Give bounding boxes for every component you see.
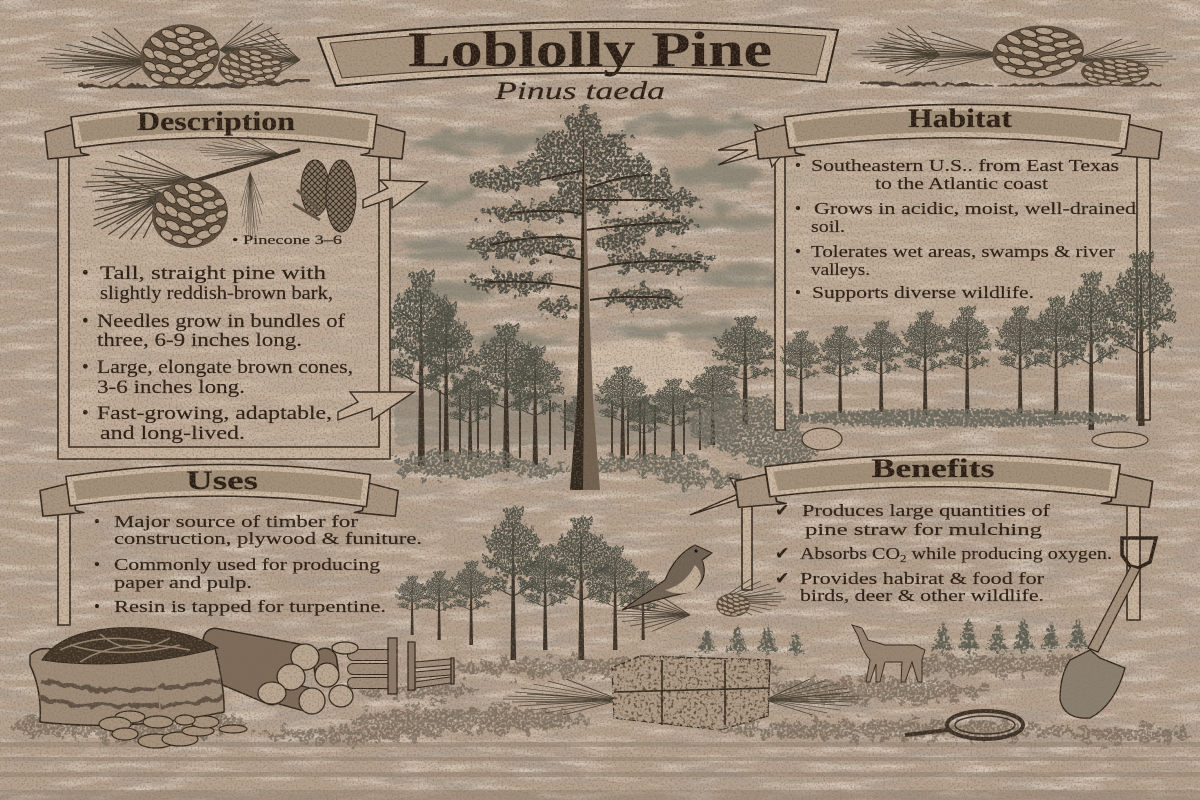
habitat list: Southeastern U.S.. from East Texas <box>811 156 1119 175</box>
icon: bird on branch <box>612 545 786 632</box>
description list: three, 6-9 inches long. <box>97 330 302 351</box>
benefits list: ✔ <box>775 569 789 588</box>
benefits list: pine straw for mulching <box>805 520 1043 539</box>
banner: benefits <box>735 454 1153 507</box>
benefits list: Provides habirat & food for <box>800 569 1044 588</box>
uses list: Resin is tapped for turpentine. <box>114 597 386 616</box>
uses list: • <box>94 555 100 574</box>
habitat list: to the Atlantic coast <box>875 174 1048 193</box>
panel: uses <box>40 465 422 625</box>
habitat list: Grows in acidic, moist, well-drained <box>814 199 1137 218</box>
benefits list: Absorbs CO <box>800 544 885 563</box>
distant fir row <box>696 618 1090 656</box>
uses list: Major source of timber for <box>114 512 358 531</box>
benefits list <box>775 501 1112 605</box>
caption: • Pinecone 3–6 <box>232 233 342 247</box>
benefits list: ✔ <box>775 501 789 520</box>
habitat list: • <box>795 156 801 175</box>
benefits list: ✔ <box>775 544 789 563</box>
benefits list: 2 <box>900 553 907 565</box>
icon: pine seed pods <box>99 711 247 748</box>
icon: pine straw bale <box>503 656 862 730</box>
rocks <box>802 428 1148 450</box>
description list: Large, elongate brown cones, <box>97 357 353 378</box>
uses list: construction, plywood & funiture. <box>114 529 422 548</box>
icon: two pinecones <box>293 160 356 232</box>
icon: shovel <box>1060 538 1156 718</box>
top right pine spray and cones <box>852 22 1176 86</box>
banner: habitat <box>755 104 1162 159</box>
description list: • <box>82 403 89 424</box>
deep forest trunks <box>395 390 735 458</box>
uses list: Commonly used for producing <box>114 555 381 574</box>
uses list: • <box>94 597 100 616</box>
title: Loblolly Pine <box>408 21 772 77</box>
habitat list: soil. <box>811 217 845 236</box>
habitat list: • <box>795 242 801 261</box>
banner: habitat: Habitat <box>908 104 1012 133</box>
subtitle: Pinus taeda <box>494 78 665 105</box>
arrow: habitat to forest <box>718 125 792 167</box>
bottom stripes <box>0 742 1200 800</box>
panel: benefits <box>690 454 1153 620</box>
benefits list: Produces large quantities of <box>802 501 1050 520</box>
icon: stacked logs <box>215 638 454 714</box>
habitat list: Tolerates wet areas, swamps & river <box>811 242 1115 261</box>
banner: uses <box>40 465 398 516</box>
description list: Fast-growing, adaptable, <box>97 403 332 424</box>
background forest left of main tree <box>382 269 778 468</box>
ground shading <box>10 655 1190 743</box>
benefits list: birds, deer & other wildlife. <box>800 586 1044 605</box>
benefits list: while producing oxygen. <box>907 544 1112 563</box>
top left pine spray and cones <box>37 18 310 94</box>
arrow: benefits to tree <box>690 478 760 515</box>
description list: and long-lived. <box>100 423 245 444</box>
uses list: paper and pulp. <box>114 573 252 592</box>
banner: uses: Uses <box>186 466 258 495</box>
habitat list <box>795 156 1137 302</box>
icon: coiled rope and tool <box>905 711 1023 739</box>
panel: description <box>45 104 405 459</box>
habitat list: • <box>795 199 801 218</box>
arrow: description to trunk <box>338 392 414 420</box>
sky glow <box>570 340 710 400</box>
uses list <box>94 512 422 616</box>
description list: • <box>82 357 89 378</box>
description list: • <box>82 263 89 284</box>
sky clouds <box>400 115 780 347</box>
main loblolly pine tree <box>466 110 714 490</box>
description list: • <box>82 311 89 332</box>
title banner <box>318 21 838 86</box>
lower forest <box>395 506 661 660</box>
panel: habitat <box>718 104 1177 450</box>
habitat list: Supports diverse wildlife. <box>812 283 1034 302</box>
description list: slightly reddish-brown bark, <box>100 283 333 304</box>
icon: deer <box>852 625 925 682</box>
habitat list: • <box>795 283 801 302</box>
banner: description: Description <box>137 107 296 136</box>
arrow: description to tree crown <box>363 180 427 208</box>
icon: burlap sack of pine straw <box>30 628 224 725</box>
description list: 3-6 inches long. <box>97 377 245 398</box>
description list: Needles grow in bundles of <box>97 311 346 332</box>
banner: benefits: Benefits <box>872 454 994 483</box>
forest undergrowth <box>390 395 820 488</box>
description list <box>82 263 353 444</box>
forest in habitat panel <box>780 251 1177 430</box>
uses list: • <box>94 512 100 531</box>
description list: Tall, straight pine with <box>100 263 327 284</box>
banner: description <box>45 104 405 159</box>
icon: pine branch with cone <box>75 134 300 255</box>
habitat list: valleys. <box>811 260 870 279</box>
